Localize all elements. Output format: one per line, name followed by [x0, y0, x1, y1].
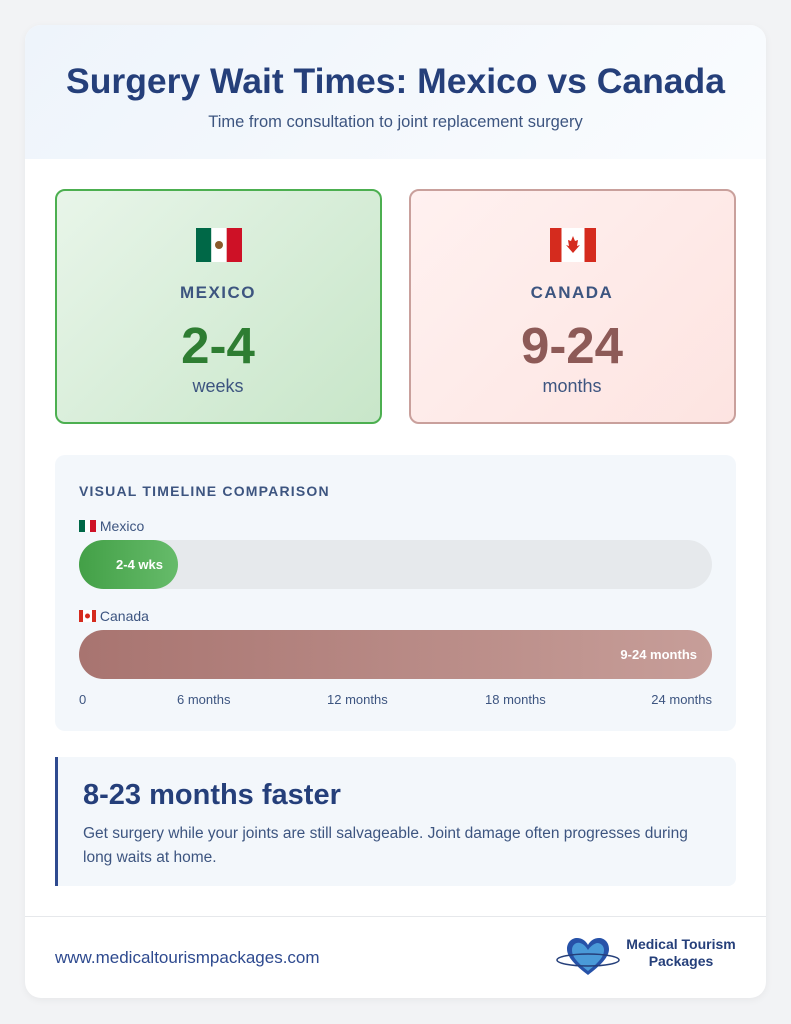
label: CANADA — [531, 283, 613, 302]
axis labels: 6 months — [177, 692, 230, 707]
axis labels: 18 months — [485, 692, 546, 707]
axis labels: 12 months — [327, 692, 388, 707]
footer url: www.medicaltourismpackages.com — [55, 948, 320, 967]
mexico row label: Mexico — [100, 518, 144, 534]
title: Surgery Wait Times: Mexico vs Canada — [66, 61, 725, 101]
heading: VISUAL TIMELINE COMPARISON — [79, 483, 330, 499]
label: MEXICO — [180, 283, 256, 302]
callout — [55, 757, 736, 886]
value: 2-4 — [181, 317, 255, 374]
value: 9-24 — [521, 317, 623, 374]
panel: timeline — [55, 455, 736, 731]
panel: canada — [409, 189, 736, 424]
unit: months — [542, 376, 602, 396]
logo — [556, 936, 736, 975]
subtitle: Time from consultation to joint replacement surgery — [208, 113, 583, 131]
logo: Medical Tourism — [626, 936, 736, 952]
bar chart: mexico: 2-4 wks — [116, 557, 163, 572]
unit: weeks — [192, 376, 244, 396]
axis labels: 0 — [79, 692, 86, 707]
bar chart: mexico — [79, 540, 712, 589]
bar chart: canada — [79, 630, 712, 679]
icon: canada flag — [550, 228, 596, 262]
header — [25, 25, 766, 159]
callout text: Get surgery while your joints are still salvageable. Joint damage often progresses during long waits at home. — [83, 825, 688, 866]
axis labels: 24 months — [651, 692, 712, 707]
panel: mexico — [55, 189, 382, 424]
logo: Packages — [649, 953, 713, 969]
callout heading: 8-23 months faster — [83, 779, 341, 811]
bar chart: canada: 9-24 months — [620, 647, 697, 662]
axis labels — [79, 692, 712, 707]
mexico row label — [79, 518, 144, 534]
icon: mexico flag — [196, 228, 242, 262]
canada row label: Canada — [100, 608, 149, 624]
